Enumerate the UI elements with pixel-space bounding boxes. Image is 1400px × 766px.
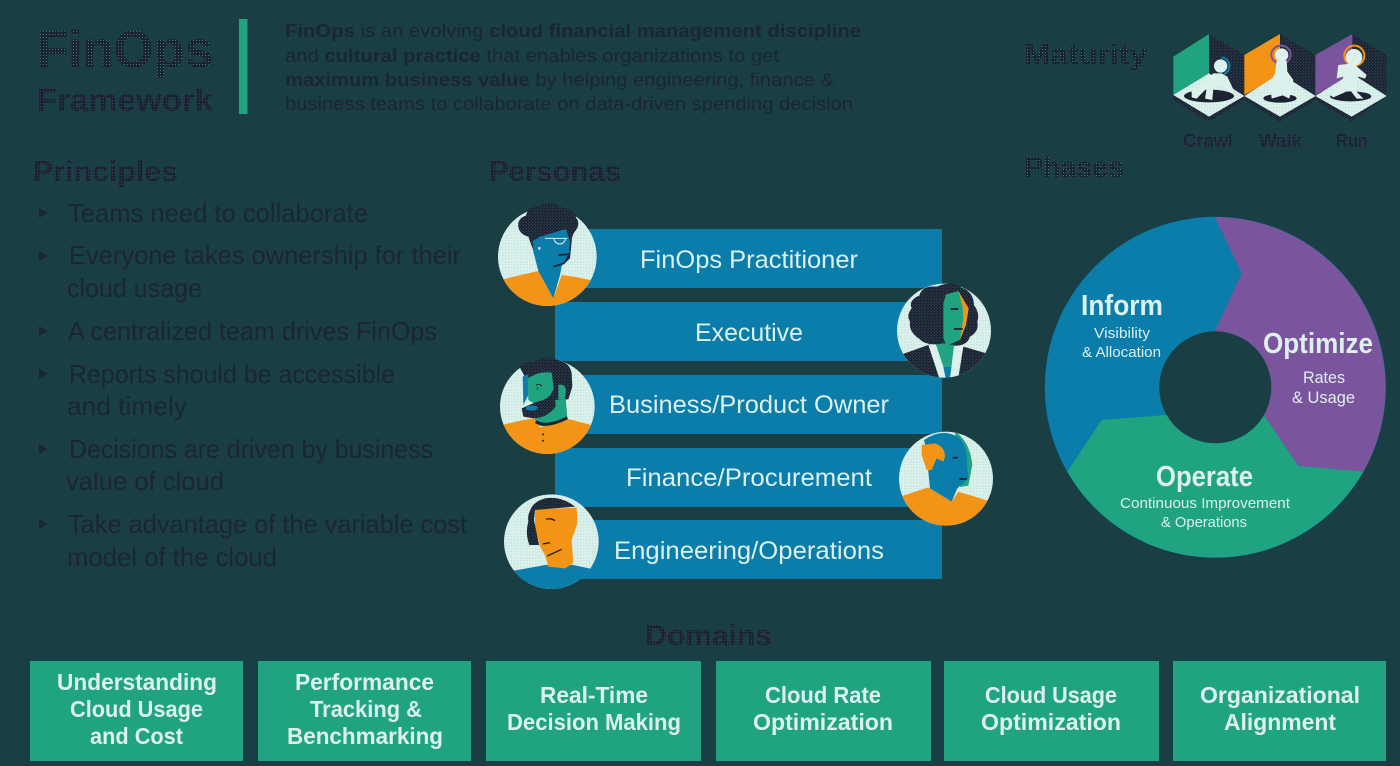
domain: understanding cloud usage and cost: and Cost xyxy=(90,723,183,749)
domain: performance tracking and benchmarking xyxy=(258,661,471,761)
avatar: Finance/Procurement xyxy=(897,432,993,532)
label: inform: Inform xyxy=(1081,290,1163,322)
title divider xyxy=(239,19,248,114)
principles list xyxy=(39,198,468,572)
persona labels: Executive xyxy=(695,319,803,347)
avatar: FinOps Practitioner xyxy=(497,203,597,308)
label: optimize: Rates xyxy=(1303,368,1345,387)
persona labels: Finance/Procurement xyxy=(626,464,872,492)
domains row xyxy=(30,661,1386,761)
label: optimize xyxy=(1263,328,1373,407)
icon: run xyxy=(1315,34,1387,122)
domain: organizational alignment xyxy=(1173,661,1386,761)
principles list: Teams need to collaborate xyxy=(68,198,368,228)
label: operate xyxy=(1120,461,1291,531)
domain: organizational alignment: Alignment xyxy=(1224,709,1336,735)
intro text: maximum business value by helping engineering, finance & xyxy=(285,69,835,90)
wheel hole xyxy=(1159,331,1271,443)
domain: performance tracking and benchmarking: Tracking & xyxy=(310,696,422,722)
avatar: Business/Product Owner xyxy=(498,358,597,457)
label: operate: Continuous Improvement xyxy=(1120,495,1291,512)
title: Framework xyxy=(37,82,213,118)
phases wheel xyxy=(1045,217,1386,558)
segment: inform xyxy=(1045,217,1386,558)
domain: real-time decision making: Decision Making xyxy=(507,709,681,735)
heading: Domains: Domains xyxy=(645,620,772,652)
heading: Personas: Personas xyxy=(489,156,621,188)
principles list: A centralized team drives FinOps xyxy=(68,316,437,346)
heading: Phases: Phases xyxy=(1024,152,1124,184)
label: optimize: Optimize xyxy=(1263,328,1373,360)
label: inform: & Allocation xyxy=(1082,344,1161,361)
maturity labels: Run xyxy=(1336,131,1368,151)
domain: understanding cloud usage and cost: Cloud Usage xyxy=(70,696,203,722)
label: optimize: & Usage xyxy=(1292,388,1355,407)
domain: understanding cloud usage and cost xyxy=(30,661,243,761)
maturity labels xyxy=(1183,131,1368,151)
title: FinOps xyxy=(37,21,213,79)
principles list: Reports should be accessible xyxy=(69,359,395,389)
title xyxy=(37,21,213,118)
principles list: value of cloud xyxy=(66,466,224,496)
persona labels: Engineering/Operations xyxy=(614,537,884,565)
label: inform xyxy=(1081,290,1163,361)
principles list: model of the cloud xyxy=(67,542,277,572)
principles list: Take advantage of the variable cost xyxy=(68,509,468,539)
label: operate: Operate xyxy=(1156,461,1253,493)
intro text: and cultural practice that enables organizations to get xyxy=(285,45,779,66)
domain: organizational alignment: Organizational xyxy=(1200,682,1360,708)
intro text xyxy=(285,20,861,114)
domain: cloud rate optimization xyxy=(716,661,931,761)
domain: real-time decision making: Real-Time xyxy=(540,682,648,708)
domain: cloud usage optimization: Cloud Usage xyxy=(985,682,1117,708)
domain: performance tracking and benchmarking: Performance xyxy=(295,669,434,695)
segment: operate xyxy=(1067,387,1363,558)
principles list: and timely xyxy=(67,391,187,421)
intro text: FinOps is an evolving cloud financial management discipline xyxy=(285,20,861,41)
principles list: Decisions are driven by business xyxy=(69,434,433,464)
persona labels: Business/Product Owner xyxy=(609,391,889,419)
persona labels: FinOps Practitioner xyxy=(640,246,858,274)
avatar: Engineering/Operations xyxy=(503,494,600,593)
icon: walk xyxy=(1244,34,1316,122)
domain: cloud usage optimization: Optimization xyxy=(981,709,1121,735)
principles list: Everyone takes ownership for their xyxy=(69,240,461,270)
principles list: cloud usage xyxy=(67,273,202,303)
domain: understanding cloud usage and cost: Understanding xyxy=(57,669,217,695)
domain: performance tracking and benchmarking: Benchmarking xyxy=(287,723,443,749)
segment: optimize xyxy=(1215,217,1386,472)
avatar: Executive xyxy=(897,284,991,378)
domain: cloud usage optimization xyxy=(944,661,1159,761)
maturity icons xyxy=(1173,34,1387,122)
maturity labels: Crawl xyxy=(1183,131,1233,151)
heading: Maturity: Maturity xyxy=(1024,39,1147,71)
maturity labels: Walk xyxy=(1259,131,1303,151)
intro text: business teams to collaborate on data-driven spending decision xyxy=(285,93,853,114)
domain: cloud rate optimization: Cloud Rate xyxy=(765,682,881,708)
bullet markers xyxy=(39,208,48,529)
label: inform: Visibility xyxy=(1094,325,1151,342)
icon: crawl xyxy=(1173,34,1244,122)
domain: cloud rate optimization: Optimization xyxy=(753,709,893,735)
persona labels xyxy=(609,246,889,565)
domain: real-time decision making xyxy=(486,661,701,761)
persona bars xyxy=(555,229,942,579)
label: operate: & Operations xyxy=(1161,514,1247,531)
heading: Principles: Principles xyxy=(33,156,178,188)
